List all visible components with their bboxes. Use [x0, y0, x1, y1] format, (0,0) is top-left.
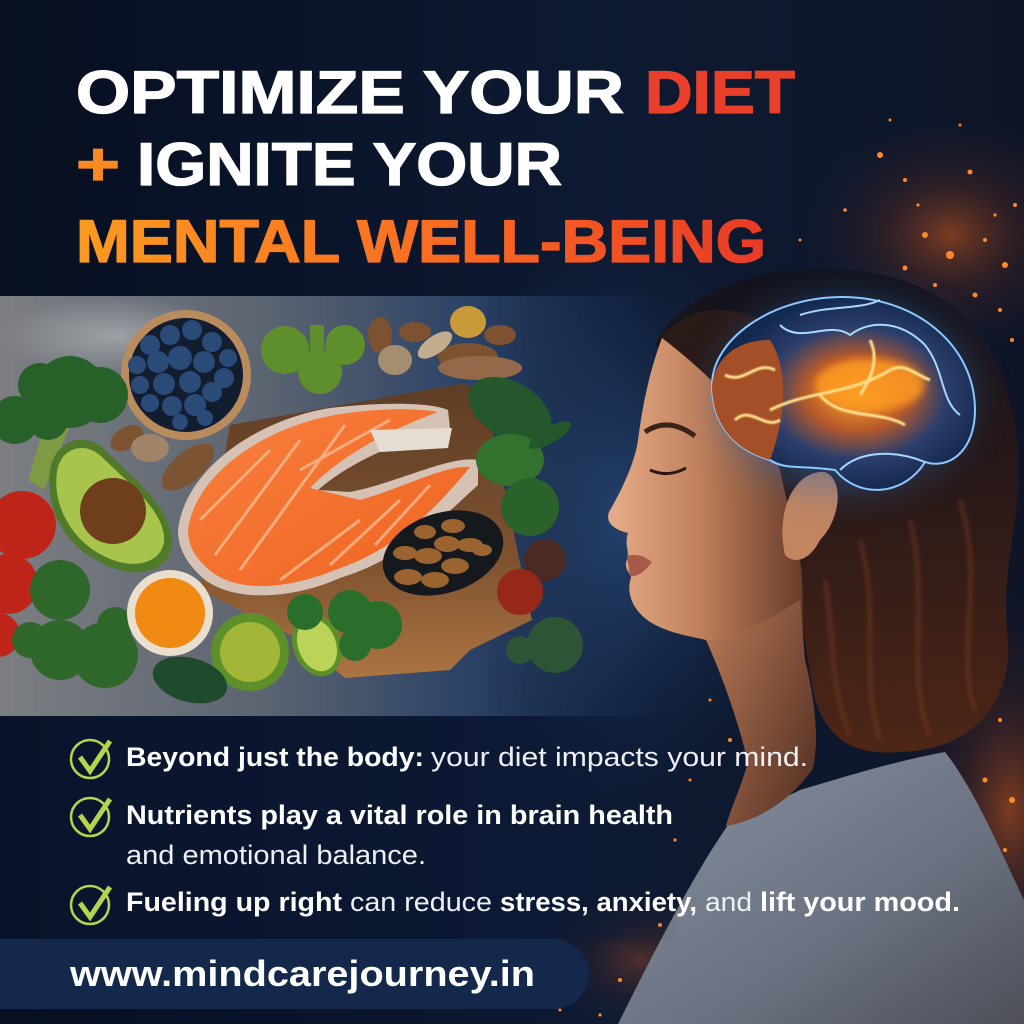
icon: honey bowl — [127, 570, 213, 656]
bullet 3 text: can reduce — [350, 887, 492, 917]
bullet 2 text — [126, 800, 673, 870]
bullet 2 — [71, 798, 673, 870]
title line 1 — [76, 59, 795, 126]
title line 1: DIET — [645, 59, 795, 126]
bullet 2 text: Nutrients play a vital role in brain health — [126, 800, 673, 830]
title — [76, 59, 795, 275]
neck shadow — [706, 600, 816, 826]
hair back — [655, 269, 1018, 752]
icon: check — [71, 886, 110, 924]
icon: herbs — [287, 590, 402, 661]
icon: broccoli bottom left — [12, 560, 138, 688]
icon: avocado — [49, 440, 172, 572]
icon: small broccoli right — [501, 478, 559, 536]
icon: lime slice — [284, 607, 350, 683]
title line 2: IGNITE YOUR — [137, 131, 562, 198]
forehead hair — [655, 310, 790, 470]
icon: small tomatoes — [497, 539, 566, 615]
bullet 3 text: lift your mood. — [760, 887, 960, 917]
website pill: www.mindcarejourney.in — [69, 953, 535, 994]
shirt — [618, 752, 1024, 1024]
panel: text band — [0, 716, 680, 940]
icon: broccoli top left — [0, 356, 128, 490]
icon: tomatoes — [0, 491, 56, 657]
bullet 1 text — [126, 742, 808, 772]
bullet 1 — [71, 740, 808, 778]
icon: check — [71, 798, 110, 836]
bullet 1 text: your diet impacts your mind. — [431, 742, 808, 772]
bullet 2 text: and emotional balance. — [126, 840, 426, 870]
bullet 3 text — [126, 887, 960, 917]
ear — [782, 472, 838, 560]
bullet 3 text: stress, anxiety, — [500, 887, 697, 917]
hair streaks — [825, 500, 975, 740]
icon: check — [71, 740, 110, 778]
icon: broccoli bottom right — [506, 617, 583, 673]
lips — [627, 555, 652, 576]
icon: glowing brain — [712, 297, 975, 490]
stone highlight — [0, 296, 230, 376]
panel: food photo — [0, 296, 660, 716]
sparks — [558, 118, 1020, 1017]
bullet 3 text: Fueling up right — [126, 887, 342, 917]
icon: blueberry bowl — [121, 310, 251, 440]
icon: lime bowl — [211, 613, 289, 691]
title line 1: OPTIMIZE YOUR — [76, 59, 624, 126]
icon: nuts top — [368, 306, 522, 380]
eyebrow — [645, 425, 695, 436]
bullet 3 text: and — [705, 887, 752, 917]
icon: broccoli top — [261, 325, 365, 394]
title line 2: + — [76, 131, 120, 198]
closed eye — [650, 468, 686, 474]
icon: green leaves — [457, 363, 575, 486]
icon: dark leaf — [148, 649, 232, 711]
face and neck — [608, 338, 816, 826]
icon: nuts left — [106, 419, 222, 499]
title line 3: MENTAL WELL-BEING — [76, 208, 766, 275]
woman figure — [608, 269, 1024, 1024]
bullet 1 text: Beyond just the body: — [126, 742, 424, 772]
bullet 3 — [71, 886, 960, 924]
website pill — [0, 939, 589, 1009]
icon: nut bowl — [372, 496, 514, 610]
icon: salmon steak — [178, 404, 478, 595]
wooden board — [200, 384, 532, 678]
stone surface — [0, 296, 660, 716]
